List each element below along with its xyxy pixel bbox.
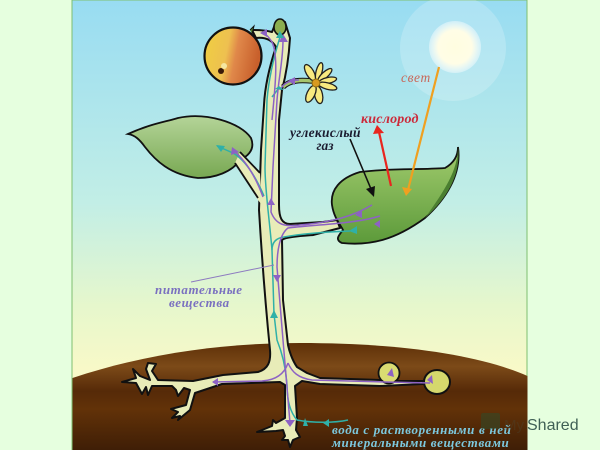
label: carbon dioxide: газ (316, 138, 334, 153)
label: water with minerals: минеральными веществами (331, 435, 509, 450)
label: nutrients (155, 282, 243, 310)
flower (283, 62, 338, 104)
label: carbon dioxide: углекислый (288, 125, 361, 140)
flow arrowheads (212, 29, 433, 427)
arrow: light (402, 67, 439, 196)
fruit (204, 26, 262, 84)
pointer: nutrients (191, 265, 274, 282)
right leaf (332, 147, 459, 244)
stem and roots (122, 22, 423, 447)
arrow: oxygen (373, 125, 391, 186)
label: light: свет (401, 70, 431, 85)
plant (122, 19, 459, 447)
soil (72, 343, 528, 450)
purple nutrient flow lines (213, 33, 430, 423)
label: oxygen: кислород (361, 112, 419, 127)
arrow: carbon dioxide (350, 139, 375, 197)
teal water flow lines (217, 37, 350, 422)
left leaf (128, 116, 252, 178)
label: nutrients: питательные (155, 282, 243, 297)
label: water with minerals: вода с растворенными в ней (332, 422, 512, 437)
panel: sky (72, 0, 527, 450)
watermark: Shared (527, 417, 579, 434)
watermark: My (504, 417, 524, 434)
label: water with minerals (331, 422, 512, 450)
bud (274, 19, 286, 35)
icon: sun (400, 0, 506, 101)
watermark (481, 413, 579, 434)
label: carbon dioxide (288, 125, 361, 153)
right leaf fold (425, 147, 458, 218)
left leaf petiole (235, 152, 262, 205)
label: nutrients: вещества (169, 295, 230, 310)
tubers (378, 362, 400, 384)
